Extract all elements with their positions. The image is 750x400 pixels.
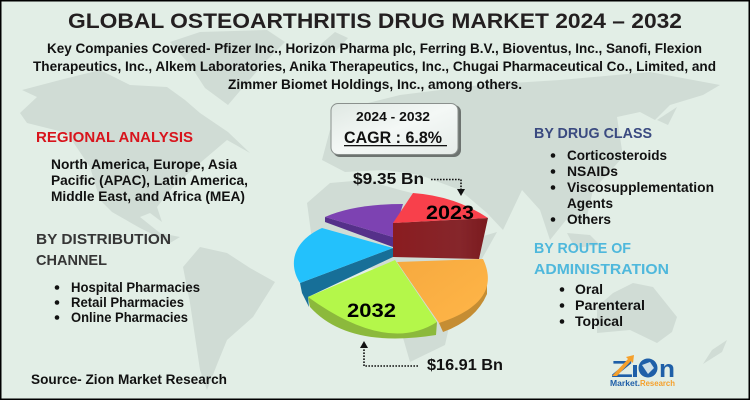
panel: regional analysis [36, 129, 248, 204]
pie chart [294, 193, 488, 338]
drug class list: Agents [567, 196, 613, 211]
slice: blue [294, 228, 393, 307]
drug class list: NSAIDs [567, 164, 618, 179]
route list: Oral [575, 282, 603, 297]
key companies text: Key Companies Covered- Pfizer Inc., Horizon Pharma plc, Ferring B.V., Bioventus, Inc., Sanofi, Flexion [47, 41, 702, 56]
distribution list: Online Pharmacies [71, 310, 188, 325]
distribution list: Retail Pharmacies [71, 295, 184, 310]
regions text: Pacific (APAC), Latin America, [51, 173, 248, 188]
heading: route of administration [534, 240, 669, 278]
heading: distribution channel [36, 231, 171, 269]
logo: Zion Market Research [610, 355, 675, 388]
regions text [51, 157, 248, 204]
route list: Parenteral [575, 298, 645, 313]
key companies text: Therapeutics, Inc., Alkem Laboratories, Anika Therapeutics, Inc., Chugai Pharmaceutical Co., Limited, and [33, 59, 716, 74]
heading: regional analysis: REGIONAL ANALYSIS [36, 129, 193, 146]
route list: Topical [575, 314, 623, 329]
route list [560, 282, 645, 329]
panel: distribution channel [36, 231, 200, 325]
heading: distribution channel: CHANNEL [36, 252, 107, 269]
drug class list: Viscosupplementation [567, 180, 714, 195]
distribution list: Hospital Pharmacies [71, 280, 200, 295]
value: 2032 market size: $16.91 Bn [427, 357, 503, 374]
regions text: Middle East, and Africa (MEA) [51, 189, 245, 204]
label: 2023: 2023 [426, 203, 474, 224]
value: 2023 market size: $9.35 Bn [353, 171, 424, 188]
heading: route of administration: ADMINISTRATION [534, 261, 669, 278]
CAGR box: CAGR : 6.8% [344, 129, 442, 147]
drug class list [551, 148, 714, 227]
slice: purple [325, 204, 403, 247]
panel: route of administration [534, 240, 669, 329]
source: Source- Zion Market Research [31, 372, 227, 387]
logo: Zion Market Research: Z [611, 356, 633, 382]
title: GLOBAL OSTEOARTHRITIS DRUG MARKET 2024 – 2032 [68, 9, 682, 33]
heading: route of administration: BY ROUTE OF [534, 240, 631, 257]
slice: green [308, 260, 437, 338]
drug class list: Others [567, 212, 611, 227]
arrow: to 2032 slice [360, 341, 418, 366]
heading: distribution channel: BY DISTRIBUTION [36, 231, 171, 248]
drug class list: Corticosteroids [567, 148, 667, 163]
key companies text: Zimmer Biomet Holdings, Inc., among others. [228, 77, 522, 92]
arrow: to 2023 slice [431, 180, 465, 196]
panel: drug class [534, 125, 714, 227]
slice: orange [397, 259, 488, 332]
key companies text [33, 41, 716, 92]
logo: Zion Market Research: Market. [610, 379, 640, 388]
logo: Zion Market Research: n [659, 356, 675, 383]
heading: drug class: BY DRUG CLASS [534, 125, 652, 142]
logo: Zion Market Research: Research [640, 379, 675, 388]
label: 2032: 2032 [347, 301, 396, 322]
distribution list [55, 280, 200, 325]
CAGR box [331, 104, 461, 157]
regions text: North America, Europe, Asia [51, 157, 238, 172]
CAGR box: 2024 - 2032 [356, 110, 430, 124]
slice: red (raised) [393, 193, 488, 259]
